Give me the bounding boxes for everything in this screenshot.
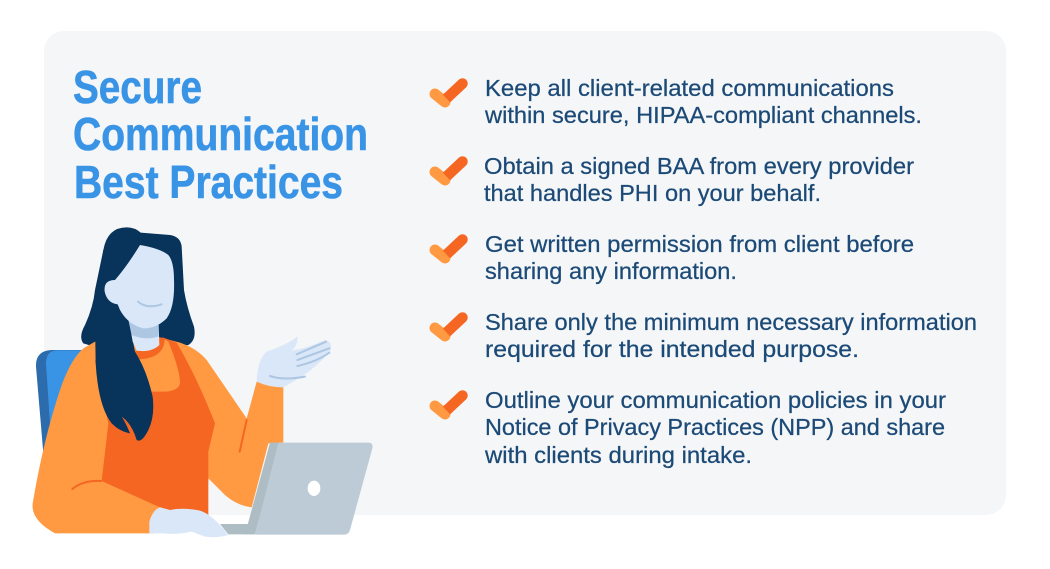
title: Communication (73, 108, 368, 160)
icon: check 4 (435, 312, 468, 336)
sleeve creases (72, 420, 247, 489)
hand: on keyboard (149, 507, 228, 537)
text: practice 2 (484, 153, 914, 206)
text: practice 4: required for the intended purpose. (485, 336, 859, 362)
neck (128, 317, 159, 351)
face (105, 245, 174, 328)
text: practice 3 (485, 231, 914, 284)
text: practice 5: Notice of Privacy Practices (NPP) and share (485, 414, 945, 440)
text: practice 4 (485, 309, 977, 362)
text: practice 3: Get written permission from client before (485, 231, 914, 257)
laptop (220, 443, 373, 535)
text: practice 5: with clients during intake. (484, 442, 752, 468)
hair front (95, 240, 153, 441)
hair back (81, 227, 195, 350)
title (73, 61, 368, 208)
check icons (435, 78, 468, 414)
title: Best Practices (74, 156, 343, 208)
text: practice 2: Obtain a signed BAA from every provider (484, 153, 914, 179)
icon: check 3 (435, 234, 468, 258)
collar and sweater neckline (135, 337, 180, 392)
text: practice 4: Share only the minimum necessary information (485, 309, 977, 335)
title: Secure (73, 61, 202, 113)
text: practice 1 (484, 75, 922, 128)
text: practice 5: Outline your communication policies in your (485, 387, 946, 413)
text: practice 1: within secure, HIPAA-compliant channels. (484, 102, 922, 128)
panel: background (44, 31, 1006, 515)
sweater body and arm (33, 337, 283, 533)
icon: check 2 (435, 156, 468, 180)
apron (95, 337, 215, 515)
icon: check 1 (435, 78, 468, 102)
text: practice 5 (484, 387, 946, 468)
hand: raised (257, 337, 331, 387)
icon: check 5 (435, 390, 468, 414)
illustration: woman at laptop (33, 227, 373, 537)
chair (36, 350, 87, 453)
text: practice 1: Keep all client-related communications (485, 75, 894, 101)
text: practice 2: that handles PHI on your behalf. (484, 180, 821, 206)
text: practice 3: sharing any information. (485, 258, 737, 284)
